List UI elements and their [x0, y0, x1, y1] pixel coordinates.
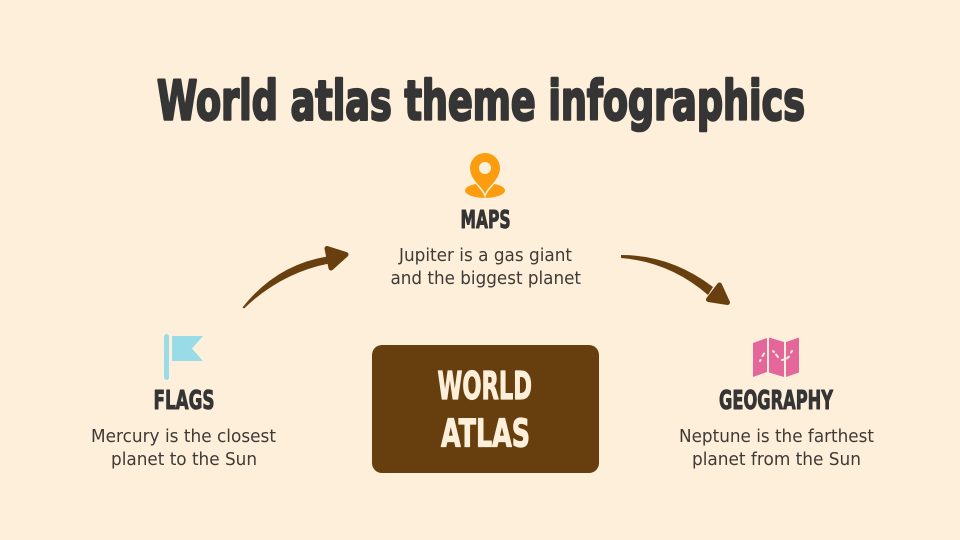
panel: flags: [91, 334, 276, 470]
icon: map pin: [465, 153, 505, 198]
arrow: maps to geography: [621, 255, 728, 302]
text: mercury description: Mercury is the closest: [91, 426, 276, 447]
text: mercury description: planet to the Sun: [111, 449, 257, 470]
text: neptune description: planet from the Sun: [692, 449, 861, 470]
text: mercury description: [91, 426, 276, 470]
icon: flag: [164, 334, 203, 380]
panel: geography: [679, 338, 874, 470]
text: jupiter description: and the biggest planet: [390, 268, 581, 289]
panel: maps: [390, 153, 581, 289]
heading: flags: FLAGS: [154, 386, 214, 416]
text: world: WORLD: [438, 364, 532, 408]
text: atlas: ATLAS: [441, 412, 530, 456]
text: jupiter description: [390, 245, 581, 289]
panel: center box: [372, 345, 599, 473]
icon: folded map: [753, 338, 799, 377]
text: jupiter description: Jupiter is a gas giant: [398, 245, 572, 266]
text: neptune description: [679, 426, 874, 470]
text: neptune description: Neptune is the farthest: [679, 426, 874, 447]
box: [372, 345, 599, 473]
heading: maps: MAPS: [460, 205, 510, 234]
heading: geography: GEOGRAPHY: [719, 386, 834, 416]
arrow: flags to maps: [242, 248, 346, 308]
